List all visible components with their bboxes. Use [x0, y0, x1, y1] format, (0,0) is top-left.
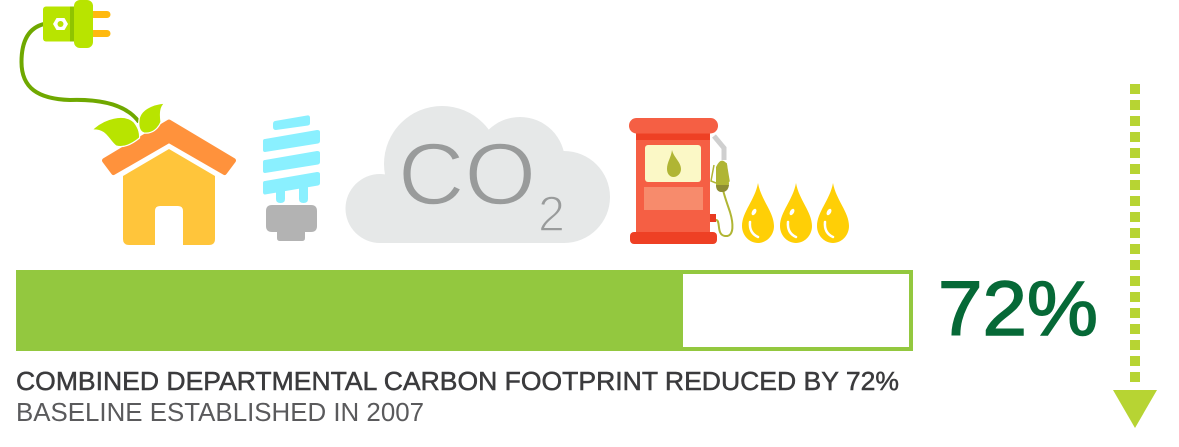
oil drop 3: [817, 183, 849, 243]
baseline note text: BASELINE ESTABLISHED IN 2007: [16, 397, 424, 427]
house roof: [104, 122, 234, 172]
oil drop 2: [780, 183, 812, 243]
CO2 label: 2: [538, 186, 565, 242]
house body: [123, 149, 215, 245]
headline text: COMBINED DEPARTMENTAL CARBON FOOTPRINT REDUCED BY 72%: [16, 366, 899, 396]
icon: energy-saving light bulb: [263, 115, 320, 241]
big percentage value: 72%: [938, 266, 1098, 352]
progress bar: 72% reduction: [16, 270, 913, 351]
CO2 label: CO: [398, 126, 536, 223]
CO2 label: [398, 126, 565, 242]
downward dashed arrow: [1113, 84, 1157, 428]
icon: oil drops: [742, 183, 849, 243]
icon: fuel pump: [629, 118, 732, 244]
icon: plug: [43, 0, 110, 48]
icon: leaves: [92, 103, 165, 147]
icon: power cord: [22, 24, 139, 122]
icon: house: [104, 122, 234, 245]
icon: CO2 cloud: [346, 106, 610, 243]
oil drop 1: [742, 183, 774, 243]
